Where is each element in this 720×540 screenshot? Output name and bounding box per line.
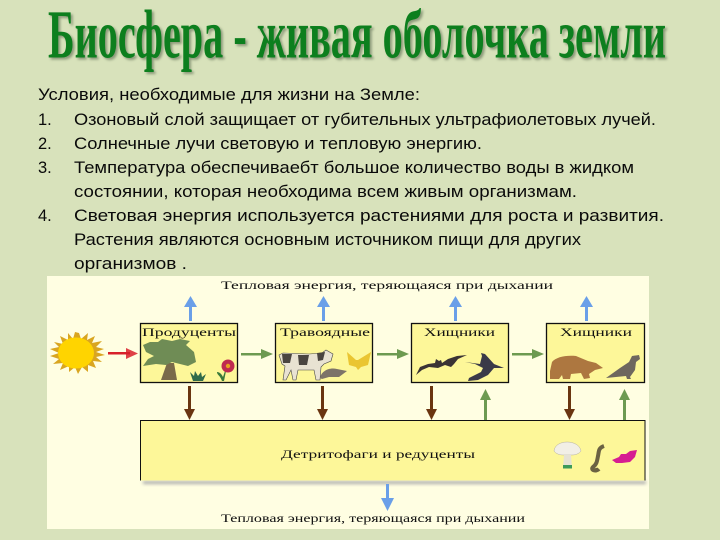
icon: mouse xyxy=(320,369,347,379)
arrow: predators to top predators xyxy=(512,349,544,359)
text block: conditions for life: Солнечные лучи световую и тепловую энергию. xyxy=(74,135,482,153)
box: predators 1: Хищники xyxy=(424,325,496,339)
top caption: Тепловая энергия, теряющаяся при дыхании xyxy=(221,278,554,292)
icon: swallow xyxy=(465,353,504,381)
text block: conditions for life: состоянии, которая необходима всем живым организмам. xyxy=(74,183,577,201)
icon: flower xyxy=(217,360,234,381)
box: herbivores: Травоядные xyxy=(280,325,370,339)
text block: conditions for life: Условия, необходимые для жизни на Земле: xyxy=(38,86,420,104)
text block: conditions for life: 3. xyxy=(38,159,52,177)
arrow: heat loss down xyxy=(381,484,394,511)
arrows: down to detritivores xyxy=(184,386,575,420)
icon: mushroom xyxy=(554,442,581,468)
text block: conditions for life: Растения являются основным источником пищи для других xyxy=(74,231,582,249)
arrows: up from detritivores xyxy=(480,389,630,420)
icon: bacteria xyxy=(612,450,637,463)
bottom caption: Тепловая энергия, теряющаяся при дыхании xyxy=(221,511,526,525)
text block: conditions for life: Световая энергия используется растениями для роста и развития. xyxy=(74,207,664,225)
icon: grass xyxy=(190,371,206,381)
text block: conditions for life: Озоновый слой защищает от губительных ультрафиолетовых лучей. xyxy=(74,111,656,129)
box: detritivores and decomposers: Детритофаги и редуценты xyxy=(281,447,475,461)
icon: vulture xyxy=(606,355,640,379)
text block: conditions for life: 4. xyxy=(38,207,52,225)
icon: bear xyxy=(550,356,603,379)
arrow: herbivores to predators xyxy=(377,349,409,359)
text block: conditions for life: 2. xyxy=(38,135,52,153)
box: detritivores and decomposers xyxy=(140,420,646,484)
box: producers xyxy=(140,324,238,382)
arrow: producers to herbivores xyxy=(241,349,273,359)
box: herbivores xyxy=(276,324,372,382)
panel: energy flow diagram xyxy=(47,276,649,529)
arrows: heat loss up xyxy=(184,296,593,321)
box: producers: Продуценты xyxy=(142,325,236,339)
text block: conditions for life: организмов . xyxy=(74,255,187,273)
icon: tree xyxy=(143,339,196,380)
icon: worm xyxy=(592,446,604,470)
box: predators 2: Хищники xyxy=(560,325,633,339)
icon: bat xyxy=(416,355,467,375)
text block: conditions for life: Температура обеспечиваебт большое количество воды в жидком xyxy=(74,159,634,177)
icon: cow xyxy=(279,350,333,380)
text block: conditions for life xyxy=(38,86,664,273)
icon: butterfly xyxy=(347,352,371,370)
icon: sun xyxy=(50,332,105,374)
box: predators 1 xyxy=(412,324,508,382)
arrow: sun to producers xyxy=(108,348,138,359)
text block: conditions for life: 1. xyxy=(38,111,52,129)
box: predators 2 xyxy=(546,324,644,382)
